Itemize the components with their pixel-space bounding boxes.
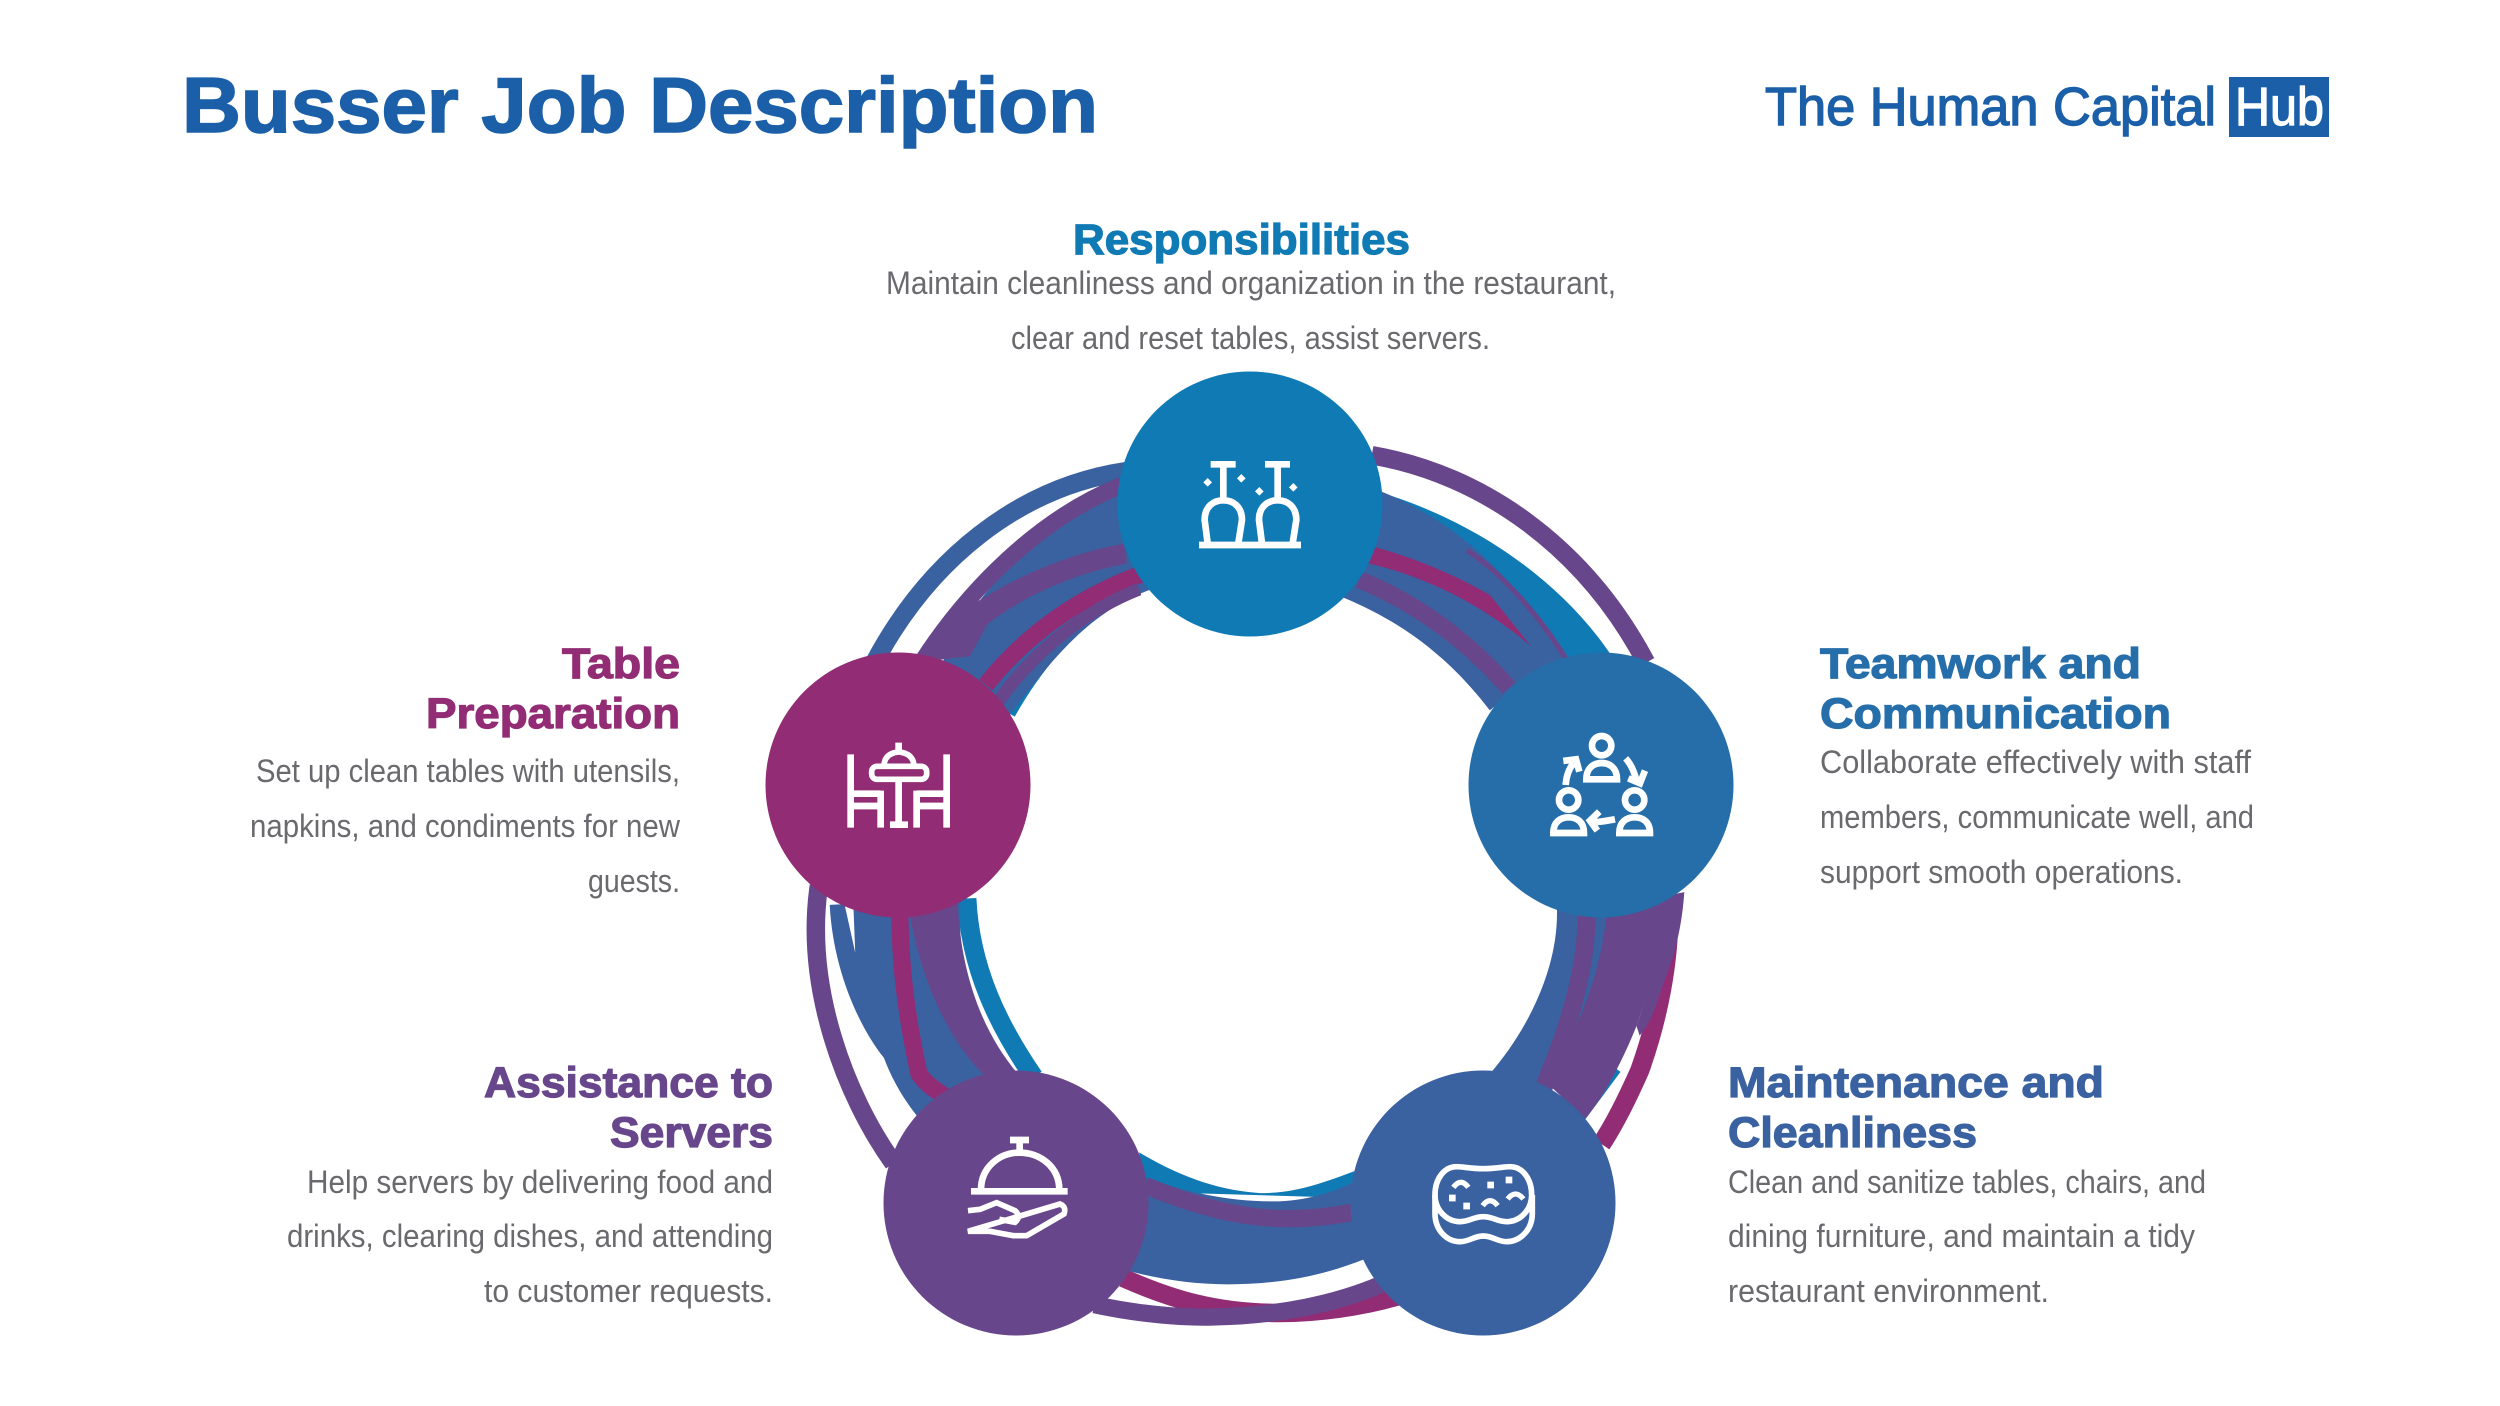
text: Teamwork and Communication: Collaborate effectively with staff (1820, 744, 2251, 780)
node: Responsibilities (1118, 372, 1382, 636)
node: Teamwork and Communication (1468, 652, 1734, 918)
text: Table Preparation (250, 640, 681, 899)
text: Maintenance and Cleanliness: Cleanliness (1728, 1109, 1977, 1157)
text: Assistance to Servers: Help servers by delivering food and (307, 1164, 773, 1200)
text: Teamwork and Communication (1820, 640, 2254, 890)
logo: The Human Capital Hub: Hub (2235, 77, 2324, 137)
icon: sponge (1435, 1167, 1532, 1242)
text: Assistance to Servers: Servers (610, 1109, 773, 1157)
node: Maintenance and Cleanliness (1350, 1070, 1616, 1336)
text: Table Preparation: guests. (588, 863, 680, 899)
icon: cloche on hand (968, 1140, 1068, 1236)
text: Teamwork and Communication: members, communicate well, and (1820, 799, 2254, 835)
text: Responsibilities: clear and reset tables, assist servers. (1011, 320, 1490, 356)
text: Assistance to Servers: to customer requests. (484, 1273, 773, 1309)
text: Responsibilities (886, 216, 1616, 356)
icon: table and chairs (851, 743, 947, 828)
icon: team cycle (1553, 736, 1650, 833)
icon: wine glasses (1199, 464, 1301, 545)
text: Responsibilities: Maintain cleanliness and organization in the restaurant, (886, 265, 1616, 301)
text: Assistance to Servers (287, 1059, 773, 1309)
text: Responsibilities: Responsibilities (1073, 216, 1410, 264)
text: Table Preparation: napkins, and condiments for new (250, 808, 681, 844)
text: Maintenance and Cleanliness: Maintenance and (1728, 1059, 2104, 1107)
text: Table Preparation: Preparation (426, 690, 680, 738)
text: Maintenance and Cleanliness (1728, 1059, 2206, 1309)
text: Assistance to Servers: Assistance to (484, 1059, 773, 1107)
text: Maintenance and Cleanliness: dining furniture, and maintain a tidy (1728, 1218, 2195, 1254)
logo: The Human Capital Hub: The Human Capital (1765, 77, 2216, 137)
text: Teamwork and Communication: support smooth operations. (1820, 854, 2183, 890)
text: Teamwork and Communication: Teamwork and (1820, 640, 2141, 688)
text: Maintenance and Cleanliness: Clean and sanitize tables, chairs, and (1728, 1164, 2206, 1200)
text: Maintenance and Cleanliness: restaurant environment. (1728, 1273, 2049, 1309)
text: Table Preparation: Table (562, 640, 680, 688)
title: Busser Job Description (182, 61, 1098, 149)
text: Table Preparation: Set up clean tables with utensils, (256, 753, 680, 789)
node: Table Preparation (766, 652, 1030, 918)
interwoven ring (816, 455, 1684, 1317)
text: Teamwork and Communication: Communication (1820, 690, 2171, 738)
text: Assistance to Servers: drinks, clearing dishes, and attending (287, 1218, 773, 1254)
node: Assistance to Servers (884, 1070, 1148, 1336)
